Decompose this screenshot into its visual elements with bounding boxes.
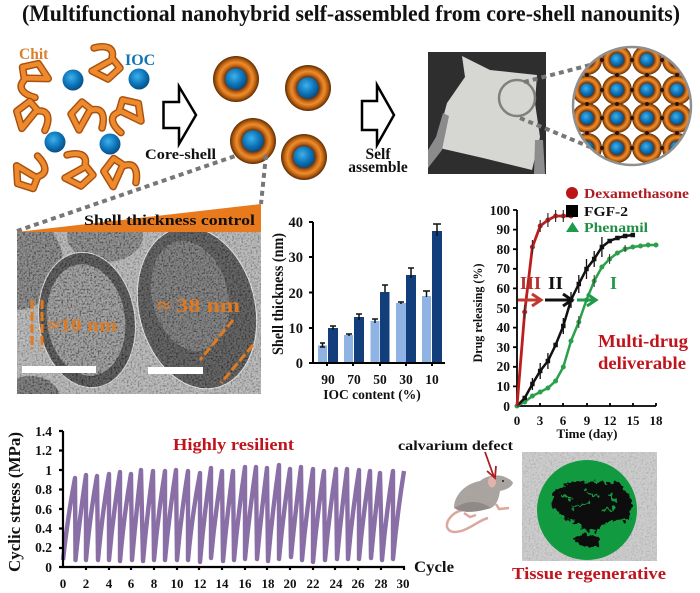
- TEM micrograph: [17, 232, 261, 394]
- series: Phenamil: [517, 245, 656, 406]
- x tick labels: 90: [321, 372, 335, 387]
- y tick labels: 90: [496, 222, 510, 237]
- y tick labels: 10: [496, 379, 510, 394]
- y tick labels: 30: [496, 340, 510, 355]
- arrow: defect site: [485, 452, 496, 478]
- legend: Dexamethasone: [584, 187, 689, 202]
- stress trace: [63, 465, 404, 562]
- stage labels and arrows: I: [610, 273, 617, 293]
- measurement dashes: [32, 300, 253, 383]
- arrow: core-shell: [164, 86, 196, 144]
- line chart: cyclic stress: [5, 424, 454, 591]
- legend: FGF-2: [584, 205, 628, 220]
- y tick labels: 10: [288, 321, 303, 337]
- y tick labels: 0.2: [35, 540, 52, 555]
- y tick labels: 0.6: [35, 502, 52, 517]
- y tick labels: 70: [496, 261, 510, 276]
- panel: raw components Chit and IOC: [10, 46, 155, 194]
- x tick labels: 15: [626, 413, 640, 428]
- x tick labels: 10: [425, 372, 439, 387]
- label: about 10 nm: ≈10 nm: [48, 315, 117, 335]
- y tick labels: 40: [288, 215, 303, 231]
- IOC spheres: [44, 68, 150, 154]
- zoom lines from sheet to lattice: [520, 65, 590, 147]
- stage labels and arrows: [518, 273, 617, 306]
- legend: [566, 187, 689, 236]
- scale bars: [22, 366, 203, 374]
- label: Chit: Chit: [19, 46, 49, 63]
- callout: highly resilient: Highly resilient: [173, 435, 294, 454]
- legend: Phenamil: [584, 221, 648, 236]
- x tick labels: 12: [194, 576, 206, 591]
- x tick labels: 16: [238, 576, 252, 591]
- bars: [318, 231, 442, 363]
- y tick labels: 50: [496, 301, 510, 316]
- x axis title: IOC content (%): [323, 387, 421, 402]
- callout: multi-drug deliverable: deliverable: [598, 353, 686, 373]
- x tick labels: 26: [352, 576, 365, 591]
- error bars: [320, 224, 441, 347]
- x tick labels: 0: [60, 576, 66, 591]
- x axis title: Time (day): [556, 426, 618, 441]
- x tick labels: [514, 413, 663, 428]
- x tick labels: 24: [330, 576, 343, 591]
- x tick labels: 14: [216, 576, 229, 591]
- photo: nanohybrid sheet: [428, 52, 546, 174]
- photo: regenerated bone: [522, 452, 657, 561]
- x tick labels: 2: [83, 576, 89, 591]
- x tick labels: 10: [170, 576, 184, 591]
- series: FGF-2: [517, 235, 633, 406]
- chitosan fragments: [10, 47, 148, 194]
- x tick labels: 28: [374, 576, 388, 591]
- x tick labels: 4: [106, 576, 113, 591]
- assembled lattice magnified: [572, 45, 692, 165]
- y tick labels: [35, 424, 52, 575]
- y tick labels: 0: [296, 356, 303, 372]
- core-shell particles: [213, 56, 331, 180]
- y tick labels: 80: [496, 242, 510, 257]
- label: IOC: IOC: [125, 52, 155, 69]
- x tick labels: 12: [604, 413, 616, 428]
- callout: tissue regenerative: Tissue regenerative: [512, 564, 666, 583]
- axes: [309, 222, 445, 366]
- label: Core-shell: Core-shell: [145, 147, 216, 163]
- stage labels and arrows: II: [548, 273, 563, 293]
- axes: [59, 431, 405, 570]
- banner: shell thickness control: Shell thickness control: [84, 213, 255, 229]
- y tick labels: 0: [45, 560, 52, 575]
- axes: [513, 210, 656, 406]
- x tick labels: 30: [399, 372, 413, 387]
- x axis title: Cycle: [414, 559, 454, 576]
- x tick labels: 50: [373, 372, 387, 387]
- x tick labels: 9: [584, 413, 591, 428]
- y axis title: Cyclic stress (MPa): [5, 432, 24, 572]
- zoom lines from particle to TEM: [17, 155, 266, 231]
- x tick labels: [60, 576, 410, 591]
- x tick labels: 30: [396, 576, 410, 591]
- line chart: drug release: [470, 187, 689, 441]
- title: (Multifunctional nanohybrid self-assembled from core-shell nanounits): [22, 1, 680, 26]
- x tick labels: 3: [537, 413, 544, 428]
- y tick labels: 60: [496, 281, 510, 296]
- banner: shell thickness control: [17, 204, 261, 232]
- y tick labels: 40: [496, 320, 510, 335]
- x tick labels: 8: [151, 576, 158, 591]
- x tick labels: 6: [128, 576, 135, 591]
- y tick labels: 20: [496, 359, 510, 374]
- label: Self assemble: Self: [366, 146, 391, 163]
- y tick labels: 0.4: [35, 521, 52, 536]
- x tick labels: 0: [514, 413, 520, 428]
- x tick labels: 6: [560, 413, 567, 428]
- y tick labels: 0: [503, 399, 510, 414]
- series: Dexamethasone: [517, 210, 571, 406]
- arrow: self assemble: [362, 85, 394, 145]
- x tick labels: 18: [262, 576, 275, 591]
- stage labels and arrows: III: [520, 273, 541, 293]
- y tick labels: 30: [288, 250, 303, 266]
- callout: multi-drug deliverable: Multi-drug: [598, 331, 688, 351]
- label: Self assemble: assemble: [348, 159, 408, 176]
- x tick labels: 20: [284, 576, 296, 591]
- x tick labels: 22: [306, 576, 320, 591]
- label: calvarium defect: calvarium defect: [398, 438, 514, 453]
- icon: mouse: [447, 475, 513, 532]
- y axis title: Shell thickness (nm): [270, 233, 287, 355]
- y tick labels: 20: [288, 286, 303, 302]
- y tick labels: 0.8: [35, 482, 52, 497]
- label: about 38 nm: ≈ 38 nm: [157, 295, 240, 317]
- x tick labels: 70: [347, 372, 361, 387]
- y tick labels: 1: [45, 463, 52, 478]
- y tick labels: [288, 215, 303, 372]
- y tick labels: 1.2: [35, 443, 52, 458]
- bar chart: shell thickness: [270, 215, 445, 402]
- y axis title: Drug releasing (%): [470, 264, 485, 362]
- y tick labels: 100: [490, 203, 510, 218]
- y tick labels: 1.4: [35, 424, 52, 439]
- x tick labels: [321, 372, 439, 387]
- y tick labels: [490, 203, 510, 414]
- x tick labels: 18: [650, 413, 663, 428]
